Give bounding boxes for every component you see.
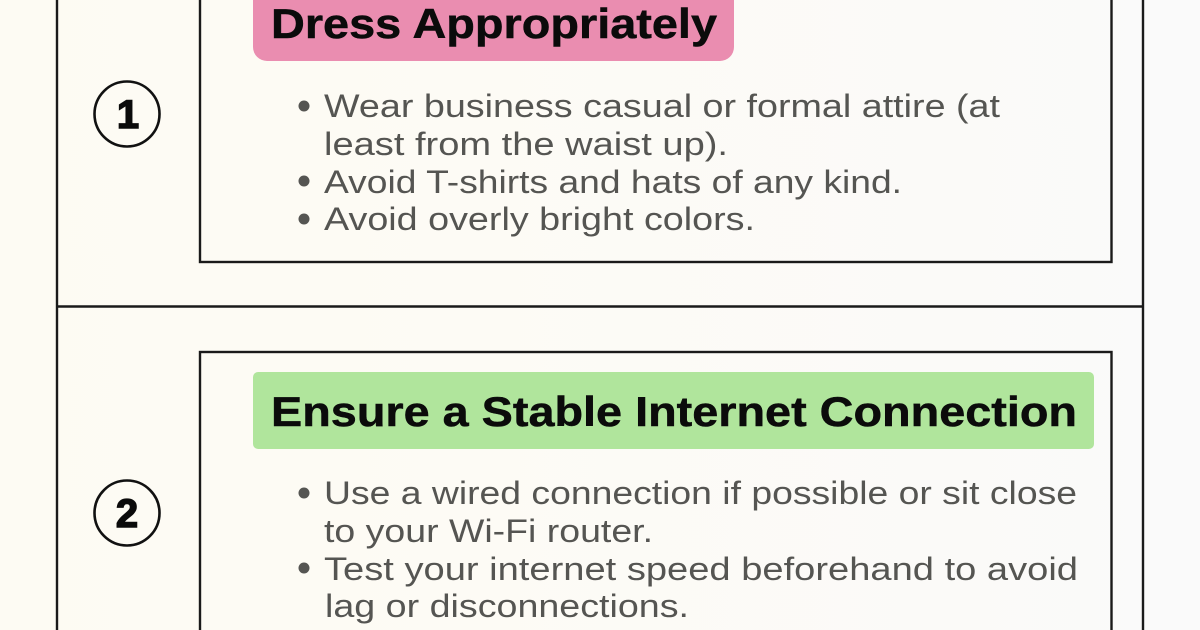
bullet list: attire tips: Wear business casual or formal attire (at	[324, 88, 1000, 124]
bullet list: attire tips: least from the waist up).	[324, 126, 728, 162]
bullet list: connection tips: Use a wired connection if possible or sit close	[324, 475, 1077, 511]
heading: dress appropriately: Dress Appropriately	[271, 0, 718, 47]
bullet list: connection tips	[298, 475, 1078, 624]
step 2 number badge	[94, 480, 160, 546]
heading: stable internet connection: Ensure a Stable Internet Connection	[271, 388, 1077, 435]
bullet list: connection tips: Test your internet speed beforehand to avoid	[324, 551, 1078, 587]
heading: stable internet connection	[253, 372, 1094, 449]
step 1 number badge	[94, 82, 160, 146]
bullet list: attire tips: Avoid T-shirts and hats of any kind.	[324, 164, 902, 200]
panel: stable internet connection	[200, 352, 1112, 630]
bullet list: connection tips: to your Wi-Fi router.	[324, 513, 653, 549]
step 1 number badge: 1	[117, 93, 139, 137]
step 2 number badge: 2	[116, 492, 138, 536]
heading: dress appropriately	[253, 0, 734, 61]
panel: dress appropriately	[200, 0, 1112, 262]
bullet list: attire tips	[298, 88, 1000, 237]
bullet list: connection tips: lag or disconnections.	[325, 588, 689, 624]
bullet list: attire tips: Avoid overly bright colors.	[324, 201, 755, 237]
